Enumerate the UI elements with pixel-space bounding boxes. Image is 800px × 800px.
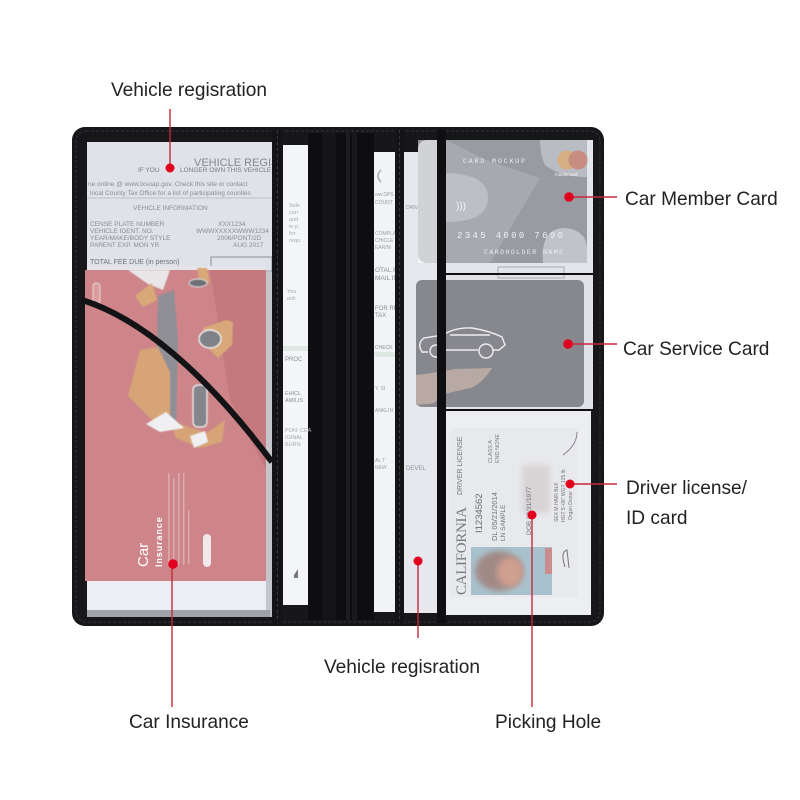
panel: right white document strip: TAX [375, 313, 386, 319]
panel: car member card: 2345 4000 7690 [457, 231, 563, 241]
panel: car insurance card [85, 266, 272, 617]
panel: left vehicle registration document: ne online @ www.txsoap.gov. Check this site or contact [88, 181, 247, 188]
panel: right white document strip: ANKLIN [375, 408, 393, 414]
panel: middle vehicle registration sliver [404, 152, 438, 613]
panel: left vehicle registration document: VEHICLE REGIS [194, 157, 278, 169]
panel: left white document strip: corr [289, 210, 299, 216]
label: driver license / ID card: ID card [626, 508, 688, 529]
panel: left white document strip [283, 145, 312, 605]
leader: car insurance [168, 559, 178, 707]
panel: driver license: I1234562 [474, 493, 485, 533]
panel: left vehicle registration document: PARENT EXP. MON YR [90, 242, 160, 249]
panel: left white document strip: Sele [289, 203, 300, 209]
panel: car member card: ))) [456, 201, 466, 212]
panel: car member card: CARDHOLDER NAME [484, 249, 563, 256]
panel: right white document strip: EAR/M [375, 245, 391, 251]
panel: middle vehicle registration sliver: DEVEL [406, 466, 426, 472]
card title: Car [135, 543, 152, 567]
card title [135, 516, 164, 567]
panel: left white document strip: IGINAL [285, 435, 303, 441]
panel: left white document strip: AMILIS [285, 398, 303, 404]
panel: left white document strip: You [287, 289, 296, 295]
panel: left vehicle registration document: AUG 2017 [233, 242, 264, 249]
icon: mastercard logo [555, 150, 588, 177]
panel: car member card: CARD MOCKUP [463, 158, 525, 165]
panel: card pockets background [446, 140, 593, 615]
panel: left vehicle registration document [87, 142, 278, 617]
panel: left vehicle registration document: IF YOU [138, 167, 160, 174]
panel: right white document strip: ww.DPS [375, 192, 394, 198]
leader: car member card [564, 192, 617, 202]
panel: left vehicle registration document: YEAR/MAKE/BODY STYLE [90, 235, 171, 242]
label: vehicle registration bottom: Vehicle regisration [324, 657, 480, 678]
panel: driver license: LN SAMPLE [500, 504, 507, 541]
panel: driver license: HGT 5'-08" WGT 125 lb [561, 469, 567, 522]
panel: left white document strip: EHICL [285, 391, 301, 397]
panel: driver license: END NONE [495, 434, 501, 463]
panel: right white document strip: AL T [375, 458, 385, 464]
panel: left vehicle registration document: XXX1234 [218, 221, 246, 228]
panel: right white document strip: MAIL IN [375, 275, 399, 282]
panel: right white document strip: OTAL F [375, 267, 397, 274]
panel: right white document strip: CHICLE [375, 238, 394, 244]
panel: left white document strip: BURN [285, 442, 301, 448]
panel: right white document strip: COMPLA [375, 231, 397, 237]
panel: left white document strip: for [289, 231, 296, 237]
panel: driver license [450, 428, 578, 597]
panel: driver license: Organ Donor [568, 491, 574, 520]
panel: left white document strip: PROC [285, 357, 303, 363]
leader: middle vehicle registration [414, 556, 422, 638]
panel: left vehicle registration document: VEHICLE IDENT. NO. [90, 228, 154, 235]
panel: car member card [418, 140, 588, 263]
right document strap [395, 130, 404, 623]
icon: open hand [416, 368, 492, 405]
panel: left vehicle registration document: local County Tax Office for a list of participating counties [90, 190, 252, 197]
leader: driver license [566, 480, 617, 488]
panel: left white document strip: and [289, 217, 298, 223]
panel: left white document strip: onli [287, 296, 296, 302]
leader: vehicle registration top [166, 109, 174, 172]
panel: car service card [416, 280, 584, 407]
card title: Insurance [154, 516, 164, 567]
label: car member card: Car Member Card [625, 189, 778, 210]
panel: left vehicle registration document: LONGER OWN THIS VEHICLE [180, 167, 272, 174]
panel: driver license: SEX M HAIR BLK [554, 482, 560, 522]
panel: driver license: DOB 08/31/1977 [526, 486, 533, 535]
panel: driver license: DL 05/21/2014 [490, 492, 499, 541]
left pocket strap [272, 130, 283, 623]
panel: left vehicle registration document: WWWXXXXXWWW1234 [196, 228, 269, 235]
panel: left vehicle registration document: VEHICLE INFORMATION [133, 205, 208, 212]
panel: left vehicle registration document: TOTAL FEE DUE (in person) [90, 259, 179, 266]
panel: left vehicle registration document: CENSE PLATE NUMBER [90, 221, 165, 228]
label: driver license / ID card: Driver license/ [626, 478, 748, 499]
icon: mastercard logo: mastercard [555, 172, 578, 177]
panel: driver license: DRIVER LICENSE [457, 436, 464, 495]
label: car service card: Car Service Card [623, 339, 769, 360]
panel: right white document strip: CHECK [375, 345, 393, 351]
panel: left vehicle registration document: 2006/PONT/2D [217, 235, 262, 242]
leader: picking hole [528, 510, 536, 707]
panel: right white document strip: NEW [375, 465, 387, 471]
panel: right white document strip [374, 152, 399, 612]
panel: middle vehicle registration sliver: DRIV [406, 205, 419, 211]
pocket dividers [446, 273, 593, 411]
label: vehicle registration top: Vehicle regisration [111, 80, 267, 101]
panel: left white document strip: PON: CEA [285, 428, 312, 434]
leader: car service card [563, 339, 617, 349]
card illustration [93, 268, 233, 448]
panel: driver license: CLASS A [488, 440, 494, 463]
icon: car outline [420, 328, 505, 358]
panel: driver license: CALIFORNIA [454, 507, 470, 595]
curved pocket strap [82, 300, 272, 462]
wallet body [72, 127, 604, 626]
label: picking hole: Picking Hole [495, 712, 601, 733]
label: car insurance: Car Insurance [129, 712, 249, 733]
right card strap [437, 130, 446, 623]
panel: left white document strip: requ [289, 238, 300, 244]
panel: left white document strip: to p [289, 224, 298, 230]
panel: right white document strip: FOR RE [375, 306, 398, 312]
panel: right white document strip: COUNT [375, 200, 393, 206]
panel: right white document strip: Y. SI [375, 386, 385, 392]
